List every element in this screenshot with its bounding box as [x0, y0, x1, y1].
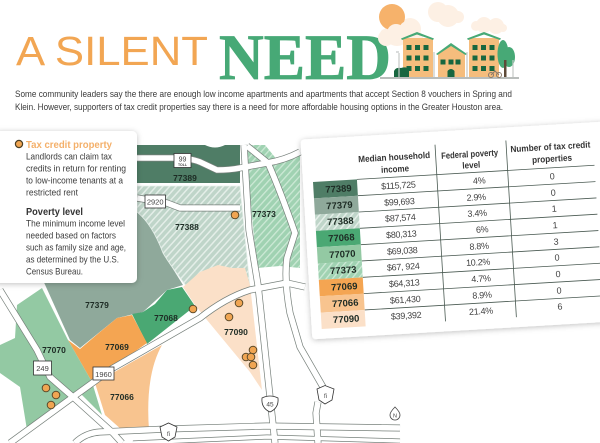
icon: sun — [379, 4, 405, 30]
legend text: poverty level: such as family size and age, — [26, 242, 126, 254]
table row: 77373: 0 — [554, 253, 560, 263]
table row: 77069: $64,313 — [389, 277, 420, 289]
zone labels: 77070 — [42, 345, 66, 355]
table header — [358, 139, 591, 177]
table header: income — [381, 163, 409, 175]
legend text: poverty level: Census Bureau. — [26, 266, 83, 278]
intro text: Some community leaders say the there are enough low income apartments and apartments that accept Section 8 vouchers in Spring and — [15, 89, 512, 100]
table row: 77069: 4.7% — [471, 273, 491, 284]
table header: Median household — [358, 150, 430, 164]
table row: 77388: 1 — [551, 204, 557, 214]
table row: 77388: 77388 — [327, 216, 354, 228]
legend text: poverty level: needed based on factors — [26, 230, 116, 242]
tax credit property dots — [42, 211, 257, 409]
icon: building middle — [436, 43, 467, 77]
table row: 77389: 77389 — [325, 183, 352, 196]
road sign: 99 toll: TOLL — [178, 163, 188, 167]
table row: 77070: 3 — [553, 237, 559, 247]
table row: 77389 — [325, 171, 555, 196]
road sign: Hardy toll — [317, 386, 334, 404]
table row: 77379: $99,693 — [384, 196, 415, 208]
table row: 77066: 77066 — [332, 298, 359, 310]
legend text: tax credit property: Landlords can claim tax — [26, 152, 112, 162]
table row: 77388: 3.4% — [467, 208, 487, 219]
table row: 77373 — [330, 253, 560, 277]
zone 77069 — [68, 315, 147, 382]
zone 77388 — [137, 186, 250, 287]
roads — [0, 145, 400, 443]
table row: 77069 — [331, 269, 561, 294]
legend text: tax credit property: restricted rent — [26, 188, 78, 198]
title: A SILENT — [16, 28, 208, 74]
icon: legend dot — [15, 140, 23, 148]
intro text — [15, 89, 512, 113]
road sign: 249: 249 — [36, 364, 49, 373]
table row: 77070: 77070 — [329, 249, 356, 261]
table header: Federal poverty — [441, 147, 498, 161]
legend text: poverty level: The minimum income level — [26, 218, 125, 230]
panel: data table — [300, 120, 600, 339]
table grid — [355, 135, 600, 326]
zone 77389 — [137, 145, 240, 183]
road sign: 2920 — [145, 195, 166, 208]
legend text: poverty level — [26, 218, 126, 278]
zone 77066 — [95, 345, 162, 430]
table row: 77379 — [326, 188, 556, 212]
table row: 77069: 0 — [555, 269, 561, 279]
zone 77373 — [245, 145, 300, 268]
zone 77068 — [132, 287, 195, 344]
zone labels: 77388 — [175, 222, 199, 232]
panel: legend — [0, 131, 137, 283]
ground line — [380, 77, 519, 79]
zone 77070 — [0, 288, 102, 430]
table row: 77068: $80,313 — [386, 228, 417, 240]
road sign: Beltway — [160, 423, 177, 441]
table row: 77379: 0 — [550, 188, 556, 198]
table row: 77090: 21.4% — [469, 306, 494, 317]
table row: 77388: $87,574 — [385, 212, 416, 224]
table row: 77068: 1 — [552, 220, 558, 230]
table row: 77090: 6 — [557, 301, 563, 312]
table row: 77389: $115,725 — [381, 179, 416, 191]
table row: 77379: 2.9% — [466, 192, 486, 203]
table header: properties — [532, 153, 572, 165]
icon: bicycle — [488, 71, 502, 78]
zone labels: 77068 — [154, 313, 178, 323]
table row: 77068: 77068 — [328, 232, 355, 245]
table row: 77066: 8.9% — [472, 290, 492, 301]
legend heading: tax credit property: Tax credit property — [26, 140, 112, 151]
legend text: tax credit property: to low-income tenants at a — [26, 176, 124, 186]
table row: 77066: 0 — [556, 285, 562, 296]
table row: 77090: $39,392 — [391, 310, 422, 322]
table row: 77389: 4% — [473, 175, 486, 186]
road sign: 45 — [262, 396, 278, 412]
zone labels: 77379 — [85, 300, 109, 310]
legend text: poverty level: as determined by the U.S. — [26, 254, 119, 266]
zone labels: 77066 — [110, 392, 134, 402]
icon: north arrow — [390, 407, 400, 420]
icon: tree — [498, 40, 515, 77]
icon: bush — [394, 67, 409, 77]
table row: 77090: 77090 — [333, 313, 360, 326]
table row: 77090 — [333, 301, 563, 326]
zip colour swatches — [313, 179, 366, 329]
table row: 77373: $67, 924 — [387, 261, 420, 273]
table row: 77068 — [328, 220, 558, 245]
icon: clouds — [378, 2, 507, 46]
icon: lamp posts — [396, 52, 513, 77]
road sign: 99 toll — [174, 154, 191, 168]
road sign: 99 toll: 99 — [179, 156, 186, 164]
road sign: Beltway: fi — [167, 432, 170, 438]
icon: building left — [401, 32, 434, 77]
table row: 77388 — [327, 204, 557, 228]
road sign: 1960: 1960 — [95, 370, 112, 379]
table row: 77070 — [329, 237, 559, 261]
zone labels: 77389 — [173, 173, 197, 183]
table header: level — [462, 160, 481, 171]
zone labels: 77373 — [252, 209, 276, 219]
title: NEED — [219, 22, 391, 94]
icon: building right — [467, 32, 501, 77]
legend text: tax credit property — [26, 152, 126, 198]
zone labels: 77069 — [105, 342, 129, 352]
legend heading: poverty level: Poverty level — [26, 207, 83, 218]
table header: Number of tax credit — [510, 139, 591, 154]
table row: 77373: 77373 — [330, 265, 357, 277]
table row: 77066 — [332, 285, 562, 310]
road sign: 2920: 2920 — [147, 198, 164, 206]
table row: 77389: 0 — [549, 171, 555, 181]
table row: 77066: $61,430 — [390, 294, 421, 306]
road sign: 1960 — [93, 367, 114, 380]
zone 77379 — [42, 212, 183, 348]
road sign: 249 — [34, 361, 52, 375]
table row: 77069: 77069 — [331, 281, 358, 294]
table row: 77373: 10.2% — [466, 257, 491, 268]
road sign: Hardy toll: fi — [324, 394, 327, 400]
table row: 77070: $69,038 — [387, 245, 418, 257]
illustration: apartment buildings — [378, 2, 519, 79]
zone 77090 — [183, 265, 262, 390]
zone labels — [42, 173, 276, 402]
table row: 77070: 8.8% — [469, 241, 489, 252]
legend text: tax credit property: credits in return for renting — [26, 164, 126, 174]
table row: 77068: 6% — [476, 224, 489, 235]
intro text: Klein. However, supporters of tax credit properties say there is a need for more affordable housing options in the Greater Houston area. — [15, 102, 503, 113]
zone labels: 77090 — [224, 327, 248, 337]
road sign: 45: 45 — [266, 402, 274, 408]
table row: 77379: 77379 — [326, 200, 353, 212]
icon: north arrow: N — [393, 414, 397, 420]
title — [16, 22, 391, 94]
map — [0, 145, 400, 443]
